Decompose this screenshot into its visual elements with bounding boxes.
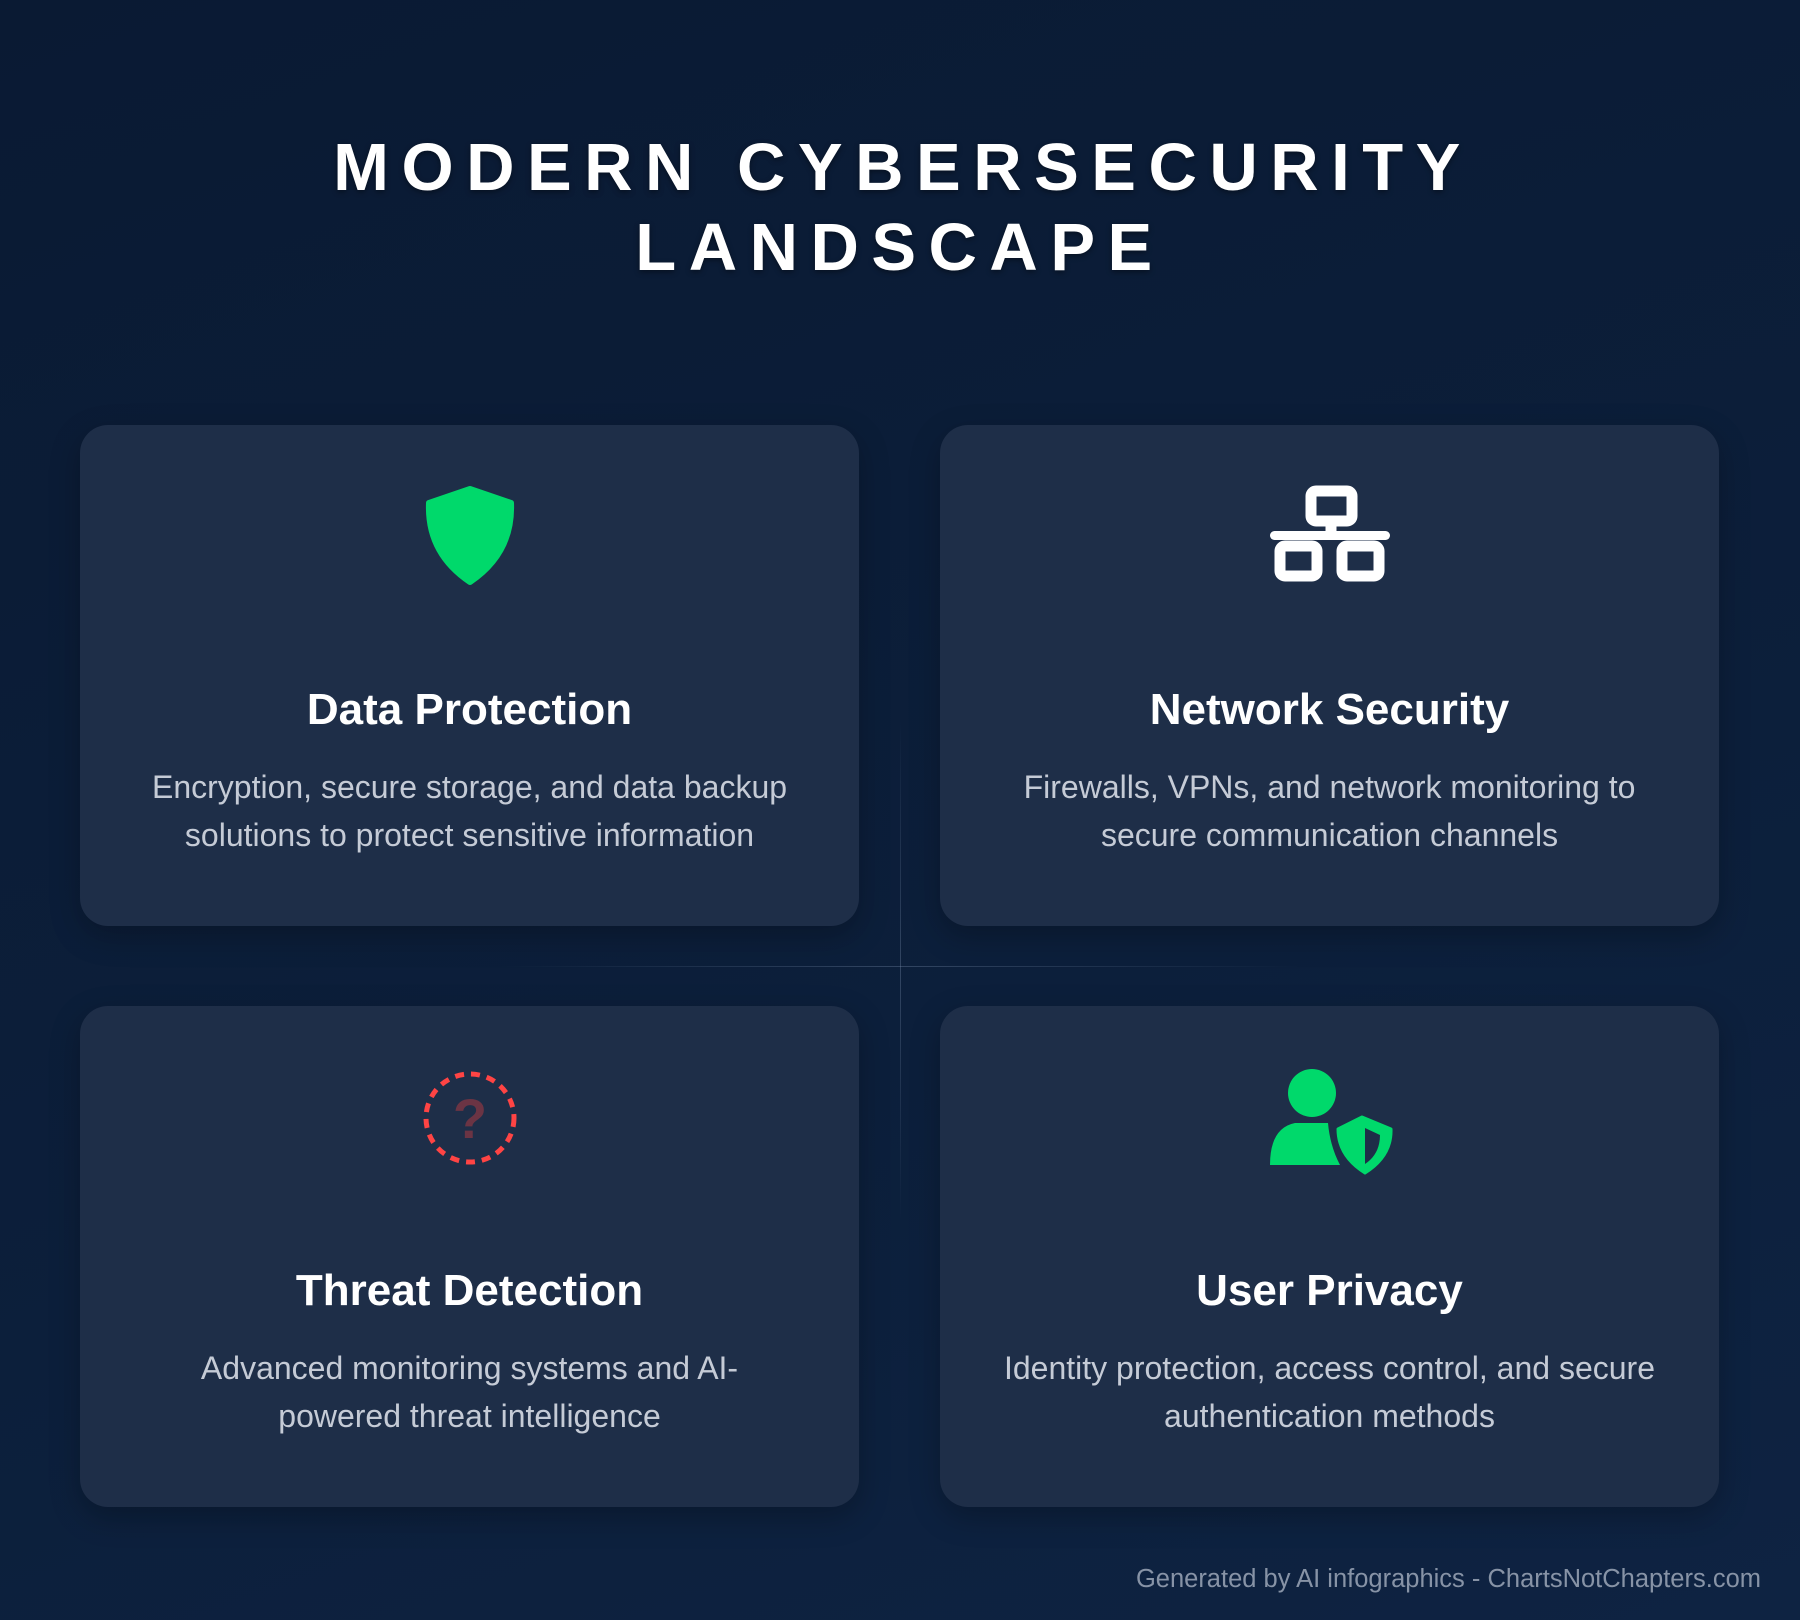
panel: user privacy <box>940 1006 1719 1507</box>
icon: shield <box>426 486 514 585</box>
panel: threat detection <box>80 1006 859 1507</box>
title: MODERN CYBERSECURITY <box>333 130 1473 205</box>
description: Encryption, secure storage, and data backup solutions to protect sensitive information <box>152 769 787 853</box>
panel: data protection <box>80 425 859 926</box>
description: Advanced monitoring systems and AI-powered threat intelligence <box>201 1350 738 1434</box>
description: Identity protection, access control, and secure authentication methods <box>1004 1350 1655 1434</box>
description: Firewalls, VPNs, and network monitoring to secure communication channels <box>1024 769 1635 853</box>
icon: dashed question circle <box>424 1072 516 1164</box>
heading: Data Protection <box>307 685 632 734</box>
heading: Network Security <box>1150 685 1509 734</box>
icon: network <box>1270 486 1390 582</box>
footer: Generated by AI infographics - ChartsNotChapters.com <box>1136 1565 1761 1593</box>
panel: network security <box>940 425 1719 926</box>
heading: User Privacy <box>1196 1266 1463 1315</box>
heading: Threat Detection <box>296 1266 643 1315</box>
icon: dashed question circle: ? <box>453 1087 487 1150</box>
icon: user shield <box>1270 1069 1393 1174</box>
title: LANDSCAPE <box>635 210 1165 285</box>
title <box>333 130 1473 285</box>
